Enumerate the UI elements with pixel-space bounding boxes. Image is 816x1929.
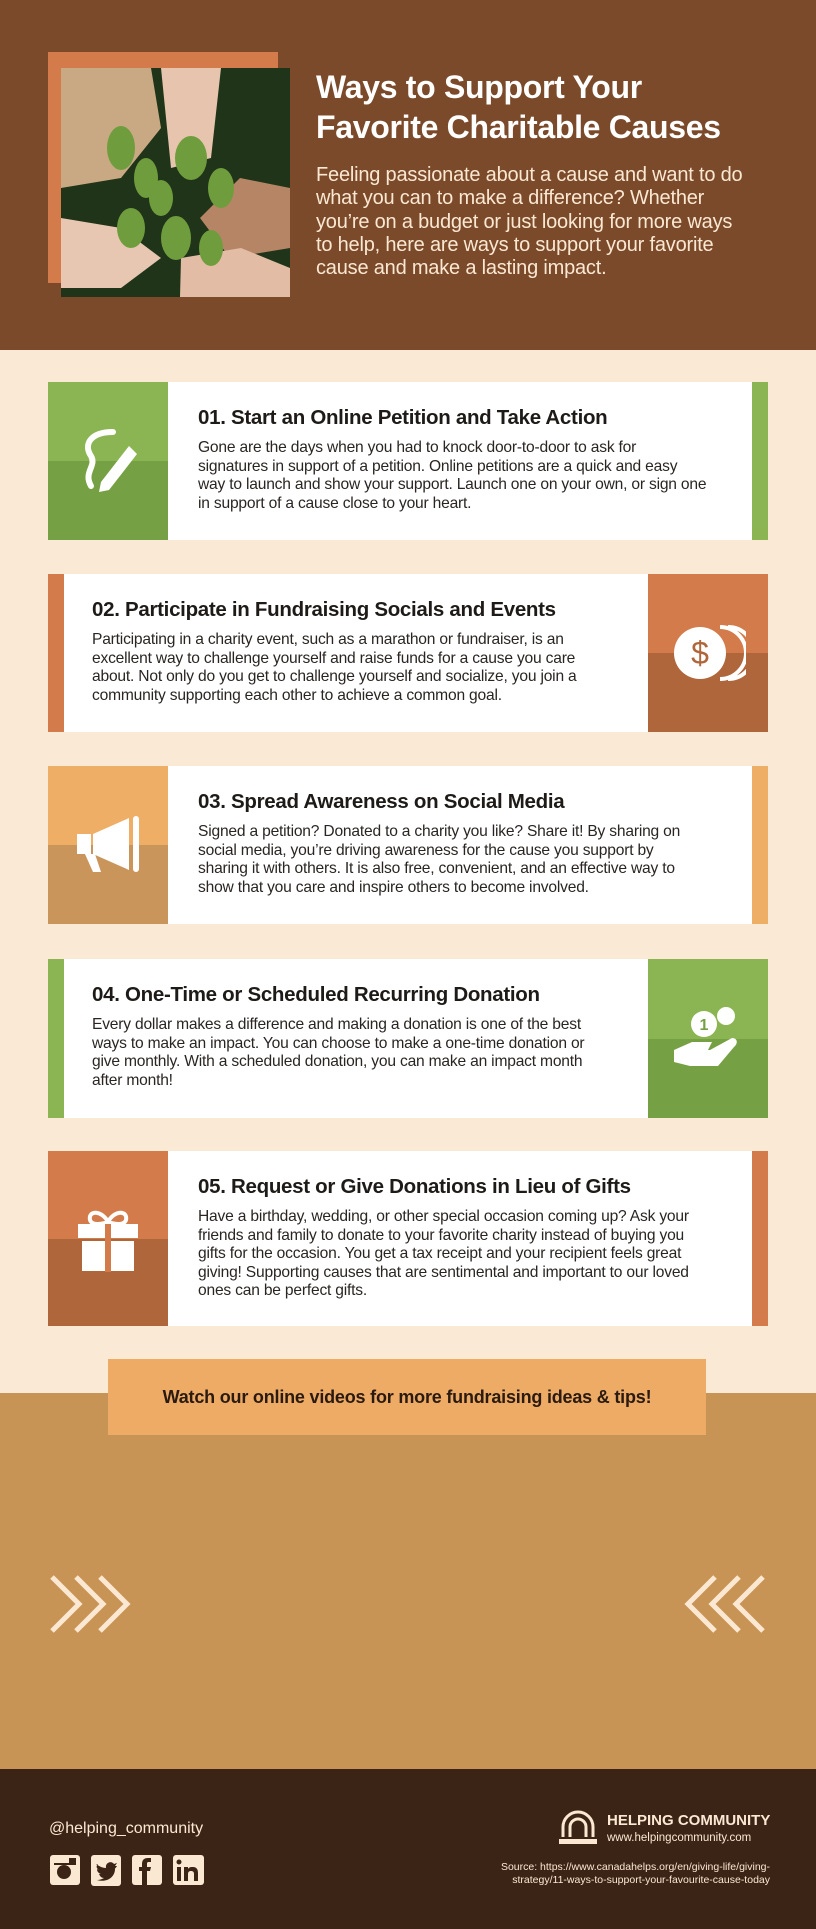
logo: helping community: www.helpingcommunity.com — [607, 1832, 751, 1844]
banner callout — [108, 1359, 706, 1435]
source text: strategy/11-ways-to-support-your-favourite-cause-today — [512, 1874, 770, 1886]
card 3: sharing it with others. It is also free, convenient, and an effective way to — [198, 860, 675, 877]
title: Ways to Support Your — [316, 69, 642, 105]
card 4: give monthly. With a scheduled donation, you can make an impact month — [92, 1053, 582, 1070]
icon: hand with coin: 1 — [700, 1016, 709, 1034]
intro text: cause and make a lasting impact. — [316, 257, 606, 279]
card 3 — [48, 766, 768, 924]
footer — [0, 1769, 816, 1929]
card 3: Signed a petition? Donated to a charity you like? Share it! By sharing on — [198, 823, 680, 840]
icon: megaphone — [48, 766, 168, 924]
card 5 — [48, 1151, 768, 1326]
text: in support of a cause close to your heart. — [198, 494, 471, 512]
card 5: giving! Supporting causes that are sentimental and important to our loved — [198, 1264, 689, 1280]
text: signatures in support of a petition. Online petitions are a quick and easy — [198, 458, 677, 474]
arrow: left chevrons — [684, 1575, 765, 1633]
text — [92, 598, 577, 704]
card 4: Every dollar makes a difference and making a donation is one of the best — [92, 1016, 581, 1033]
card 5: friends and family to donate to your favorite charity instead of buying you — [198, 1226, 684, 1244]
text: 02. Participate in Fundraising Socials and Events — [92, 598, 556, 621]
card 4 — [48, 959, 768, 1118]
header band — [0, 0, 816, 350]
social icons — [50, 1855, 204, 1886]
text — [198, 406, 706, 512]
intro text — [316, 164, 742, 279]
title — [316, 69, 721, 145]
card 5: gifts for the occasion. You get a tax receipt and your recipient feels great — [198, 1245, 681, 1262]
photo frame accent — [48, 52, 278, 283]
photo: hands holding seedlings — [61, 68, 290, 297]
card 3: show that you care and inspire others to become involved. — [198, 878, 589, 896]
banner callout: Watch our online videos for more fundraising ideas & tips! — [163, 1387, 651, 1407]
icon: hand with coin — [648, 959, 768, 1118]
card 2 — [48, 574, 768, 732]
logo: helping community: HELPING COMMUNITY — [607, 1812, 770, 1829]
icon: coins: $ — [691, 635, 709, 671]
intro text: what you can to make a difference? Whether — [316, 187, 704, 209]
text: community supporting each other to achieve a common goal. — [92, 686, 502, 704]
handle: @helping_community — [49, 1820, 203, 1837]
tan band — [0, 1393, 816, 1769]
intro text: you’re on a budget or just looking for more ways — [316, 211, 732, 233]
text: 01. Start an Online Petition and Take Action — [198, 406, 607, 429]
logo: helping community — [559, 1810, 770, 1844]
text: excellent way to challenge yourself and raise funds for a cause you care — [92, 650, 575, 666]
card 1 — [48, 382, 768, 540]
intro text: Feeling passionate about a cause and want to do — [316, 164, 742, 186]
source text — [501, 1861, 770, 1886]
title: Favorite Charitable Causes — [316, 109, 721, 145]
arrow: right chevrons — [50, 1575, 130, 1633]
card 5: ones can be perfect gifts. — [198, 1282, 367, 1299]
text: Participating in a charity event, such as a marathon or fundraiser, is an — [92, 631, 564, 648]
icon: coins — [648, 574, 768, 732]
card 5: 05. Request or Give Donations in Lieu of Gifts — [198, 1175, 631, 1198]
text: about. Not only do you get to challenge yourself and socialize, you join a — [92, 668, 577, 685]
text: way to launch and show your support. Launch one on your own, or sign one — [198, 476, 706, 493]
card 4: 04. One-Time or Scheduled Recurring Donation — [92, 983, 540, 1006]
intro text: to help, here are ways to support your favorite — [316, 234, 714, 256]
source text: Source: https://www.canadahelps.org/en/giving-life/giving- — [501, 1861, 770, 1873]
card 3: social media, you’re driving awareness for the cause you support by — [198, 842, 654, 858]
card 4: after month! — [92, 1072, 173, 1088]
card 4: ways to make an impact. You can choose to make a one-time donation or — [92, 1034, 584, 1052]
card 5: Have a birthday, wedding, or other special occasion coming up? Ask your — [198, 1208, 689, 1225]
icon: pen signature — [48, 382, 168, 540]
icon: gift — [48, 1151, 168, 1326]
card 3: 03. Spread Awareness on Social Media — [198, 790, 564, 813]
text: Gone are the days when you had to knock door-to-door to ask for — [198, 439, 636, 456]
